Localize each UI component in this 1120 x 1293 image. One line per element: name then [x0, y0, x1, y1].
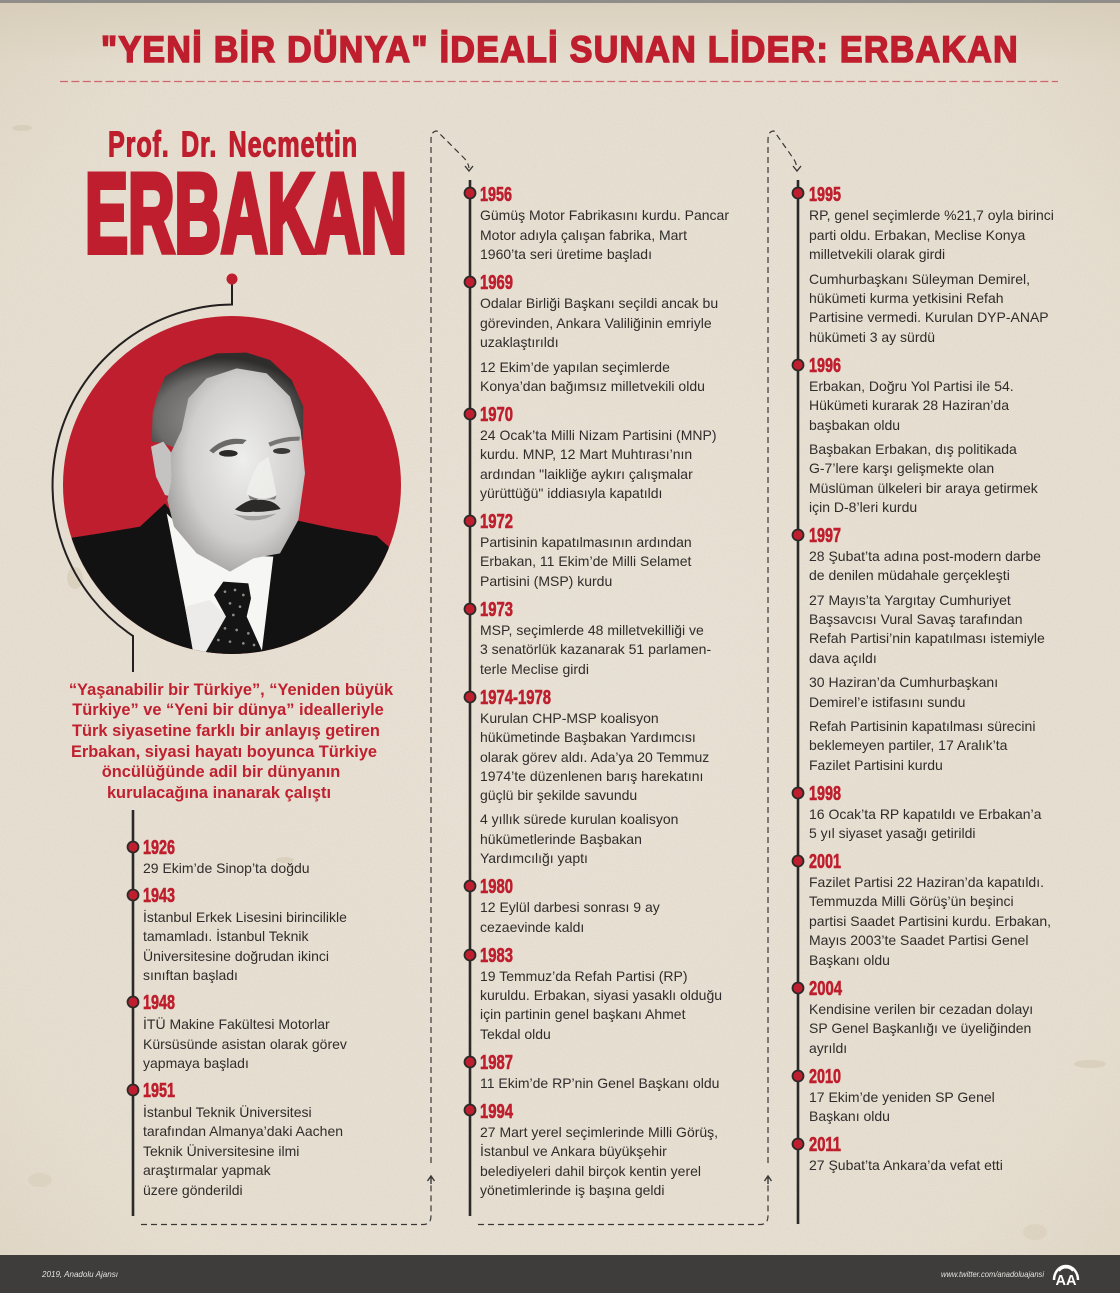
1951: İstanbul Teknik Üniversitesi [143, 1103, 312, 1120]
1956: Motor adıyla çalışan fabrika, Mart [480, 227, 687, 243]
1948: yapmaya başladı [143, 1055, 249, 1071]
name heading [85, 124, 407, 276]
1983: 1983 [480, 945, 513, 967]
moustache [235, 500, 281, 512]
intro quote: Türkiye” ve “Yeni bir dünya” idealleriyle [72, 701, 384, 719]
nose [247, 457, 277, 498]
1951 [128, 1080, 343, 1198]
1969: uzaklaştırıldı [480, 334, 559, 350]
1973: terle Meclise girdi [480, 661, 589, 677]
title divider [60, 80, 1058, 82]
intro quote: “Yaşanabilir bir Türkiye”, “Yeniden büyük [69, 681, 394, 699]
brows [209, 439, 247, 453]
1994: yönetimlerinde iş başına geldi [480, 1182, 664, 1198]
1995: Cumhurbaşkanı Süleyman Demirel, [809, 271, 1030, 287]
face and neck [167, 368, 305, 572]
1969: Odalar Birliği Başkanı seçildi ancak bu [480, 295, 718, 311]
intro quote: Türk siyasetine farklı bir anlayış getiren [72, 722, 380, 740]
1997: 28 Şubat’ta adına post-modern darbe [809, 548, 1041, 564]
1983: için partinin genel başkanı Ahmet [480, 1006, 686, 1022]
1972: 1972 [480, 511, 513, 533]
footer credit: 2019, Anadolu Ajansı [41, 1269, 118, 1279]
1994 [464, 1101, 718, 1198]
1995: milletvekili olarak girdi [809, 246, 945, 262]
1980 [464, 876, 660, 935]
1983: 19 Temmuz’da Refah Partisi (RP) [480, 968, 687, 984]
1948: İTÜ Makine Fakültesi Motorlar [143, 1015, 330, 1032]
1973 [464, 599, 711, 677]
portrait [63, 316, 401, 673]
1998: 5 yıl siyaset yasağı getirildi [809, 825, 976, 841]
1926 [128, 837, 310, 876]
icon: Anadolu Agency logo: AA [1056, 1272, 1077, 1289]
2001: Fazilet Partisi 22 Haziran’da kapatıldı. [809, 874, 1044, 890]
1943 [128, 885, 347, 983]
2004: SP Genel Başkanlığı ve üyeliğinden [809, 1020, 1031, 1036]
1974-1978 [464, 687, 709, 866]
1974-1978: Kurulan CHP-MSP koalisyon [480, 710, 659, 726]
suit [72, 504, 389, 654]
1980: cezaevinde kaldı [480, 919, 584, 935]
1973: 1973 [480, 599, 513, 621]
1996 [792, 355, 1039, 515]
1980: 1980 [480, 876, 513, 898]
1996: G-7’lere karşı gelişmekte olan [809, 460, 994, 476]
1956 [464, 184, 729, 262]
1983: kuruldu. Erbakan, siyasi yasaklı olduğu [480, 987, 722, 1003]
eyes [219, 450, 238, 457]
1995: RP, genel seçimlerde %21,7 oyla birinci [809, 207, 1054, 223]
1974-1978: güçlü bir şekilde savundu [480, 787, 637, 803]
2004: ayrıldı [809, 1040, 847, 1056]
timeline column 3 [792, 180, 1054, 1224]
1996: Erbakan, Doğru Yol Partisi ile 54. [809, 378, 1014, 394]
1997: 27 Mayıs’ta Yargıtay Cumhuriyet [809, 592, 1011, 608]
arrow: column 1 to column 2 [141, 131, 473, 1224]
1951: araştırmalar yapmak [143, 1162, 272, 1178]
2011: 27 Şubat’ta Ankara’da vefat etti [809, 1157, 1003, 1173]
2011: 2011 [809, 1134, 841, 1156]
1972: Partisinin kapatılmasının ardından [480, 534, 692, 550]
1951: 1951 [143, 1080, 175, 1102]
1974-1978: hükümetlerinde Başbakan [480, 831, 642, 847]
name heading: ERBAKAN [85, 151, 407, 276]
1994: 27 Mart yerel seçimlerinde Milli Görüş, [480, 1124, 718, 1140]
1974-1978: 1974-1978 [480, 687, 551, 709]
1973: 3 senatörlük kazanarak 51 parlamen- [480, 641, 711, 657]
arrow: column 2 to column 3 [478, 131, 801, 1224]
intro quote: Erbakan, siyasi hayatı boyunca Türkiye [71, 743, 377, 761]
1997: Başsavcısı Vural Savaş tarafından [809, 611, 1022, 627]
1987: 11 Ekim’de RP’nin Genel Başkanı oldu [480, 1075, 719, 1091]
2001: 2001 [809, 851, 841, 873]
1997: dava açıldı [809, 650, 877, 666]
1996: için D-8’leri kurdu [809, 499, 917, 515]
1998: 1998 [809, 783, 841, 805]
name heading: Prof. Dr. Necmettin [108, 124, 358, 164]
intro quote: öncülüğünde adil bir dünyanın [102, 763, 340, 781]
1969: 1969 [480, 272, 513, 294]
1997 [792, 525, 1045, 773]
1970: ardından "laikliğe aykırı çalışmalar [480, 466, 693, 482]
1943: tamamladı. İstanbul Teknik [143, 927, 309, 944]
1994: 1994 [480, 1101, 514, 1123]
1973: MSP, seçimlerde 48 milletvekilliği ve [480, 622, 704, 638]
1997: de denilen müdahale gerçekleşti [809, 567, 1010, 583]
1996: Hükümeti kurarak 28 Haziran’da [809, 397, 1009, 413]
1956: 1960’ta seri üretime başladı [480, 246, 652, 262]
timeline column 2 [464, 180, 729, 1216]
footer link: www.twitter.com/anadoluajansi [941, 1269, 1045, 1279]
1983: Tekdal oldu [480, 1026, 551, 1042]
1974-1978: hükümetinde Başbakan Yardımcısı [480, 729, 696, 745]
1948 [128, 992, 347, 1071]
1995: hükümeti 3 ay sürdü [809, 329, 935, 345]
1970: kurdu. MNP, 12 Mart Muhtırası’nın [480, 446, 692, 462]
1995: hükümeti kurma yetkisini Refah [809, 290, 1004, 306]
2011 [792, 1134, 1003, 1173]
1997: 30 Haziran’da Cumhurbaşkanı [809, 674, 998, 690]
2004: Kendisine verilen bir cezadan dolayı [809, 1001, 1033, 1017]
1948: Kürsüsünde asistan olarak görev [143, 1036, 347, 1052]
2004 [792, 978, 1033, 1056]
1987: 1987 [480, 1052, 513, 1074]
tie [205, 582, 262, 653]
1974-1978: 4 yıllık sürede kurulan koalisyon [480, 811, 678, 827]
1969: görevinden, Ankara Valiliğinin emriyle [480, 315, 712, 331]
1987 [464, 1052, 719, 1091]
1970: 24 Ocak’ta Milli Nizam Partisini (MNP) [480, 427, 716, 443]
1951: Teknik Üniversitesine ilmi [143, 1142, 299, 1159]
1983 [464, 945, 722, 1042]
2001 [792, 851, 1051, 968]
2001: Temmuzda Milli Görüş’ün beşinci [809, 893, 1014, 909]
intro quote [69, 681, 394, 802]
1926: 1926 [143, 837, 175, 859]
1951: üzere gönderildi [143, 1182, 243, 1198]
2004: 2004 [809, 978, 843, 1000]
1972 [464, 511, 692, 589]
1996: Başbakan Erbakan, dış politikada [809, 441, 1017, 457]
1970: yürüttüğü" iddiasıyla kapatıldı [480, 485, 662, 501]
1926: 29 Ekim’de Sinop’ta doğdu [143, 860, 310, 876]
icon: Anadolu Agency logo [1054, 1266, 1078, 1289]
1996: başbakan oldu [809, 417, 900, 433]
2010 [792, 1066, 995, 1124]
2001: Mayıs 2003’te Saadet Partisi Genel [809, 932, 1028, 948]
connector arc [53, 274, 237, 672]
1996: Müslüman ülkeleri bir araya getirmek [809, 480, 1039, 496]
1998: 16 Ocak’ta RP kapatıldı ve Erbakan’a [809, 806, 1042, 822]
timeline column 1 [128, 810, 347, 1216]
1995 [792, 184, 1054, 345]
1997: Refah Partisinin kapatılması sürecini [809, 718, 1035, 734]
1970: 1970 [480, 404, 513, 426]
1969 [464, 272, 718, 394]
1943: İstanbul Erkek Lisesini birincilikle [143, 908, 347, 925]
hair [152, 353, 303, 453]
mouth [233, 513, 277, 520]
1995: Partisine vermedi. Kurulan DYP-ANAP [809, 309, 1049, 325]
1995: 1995 [809, 184, 841, 206]
shirt [167, 513, 273, 650]
1943: Üniversitesine doğrudan ikinci [143, 947, 329, 964]
1997: Fazilet Partisini kurdu [809, 757, 943, 773]
title: "YENİ BİR DÜNYA" İDEALİ SUNAN LİDER: ERBAKAN [101, 28, 1019, 70]
1995: parti oldu. Erbakan, Meclise Konya [809, 227, 1026, 243]
1969: 12 Ekim’de yapılan seçimlerde [480, 359, 670, 375]
1996: 1996 [809, 355, 841, 377]
1956: Gümüş Motor Fabrikasını kurdu. Pancar [480, 207, 729, 223]
1974-1978: Yardımcılığı yaptı [480, 850, 588, 866]
2001: Başkanı oldu [809, 952, 890, 968]
1972: Partisini (MSP) kurdu [480, 573, 612, 589]
1994: İstanbul ve Ankara büyükşehir [480, 1142, 667, 1159]
1997: Refah Partisi’nin kapatılması istemiyle [809, 630, 1045, 646]
2010: 2010 [809, 1066, 841, 1088]
1943: 1943 [143, 885, 175, 907]
1997: Demirel’e istifasını sundu [809, 694, 965, 710]
2001: partisi Saadet Partisini kurdu. Erbakan, [809, 913, 1051, 929]
1980: 12 Eylül darbesi sonrası 9 ay [480, 899, 660, 915]
1951: tarafından Almanya’daki Aachen [143, 1123, 343, 1139]
2010: 17 Ekim’de yeniden SP Genel [809, 1089, 995, 1105]
intro quote: kurulacağına inanarak çalıştı [107, 784, 331, 802]
1972: Erbakan, 11 Ekim’de Milli Selamet [480, 553, 691, 569]
1998 [792, 783, 1042, 841]
1997: 1997 [809, 525, 841, 547]
1997: beklemeyen partiler, 17 Aralık’ta [809, 737, 1008, 753]
1974-1978: 1974’te düzenlenen barış harekatını [480, 768, 703, 784]
1948: 1948 [143, 992, 175, 1014]
1974-1978: olarak görev aldı. Ada’ya 20 Temmuz [480, 749, 709, 765]
1969: Konya’dan bağımsız milletvekili oldu [480, 378, 705, 394]
ear [151, 442, 172, 497]
2010: Başkanı oldu [809, 1108, 890, 1124]
1956: 1956 [480, 184, 512, 206]
1943: sınıftan başladı [143, 967, 238, 983]
1994: belediyeleri dahil birçok kentin yerel [480, 1163, 701, 1179]
footer bar [0, 1255, 1120, 1293]
1970 [464, 404, 716, 501]
